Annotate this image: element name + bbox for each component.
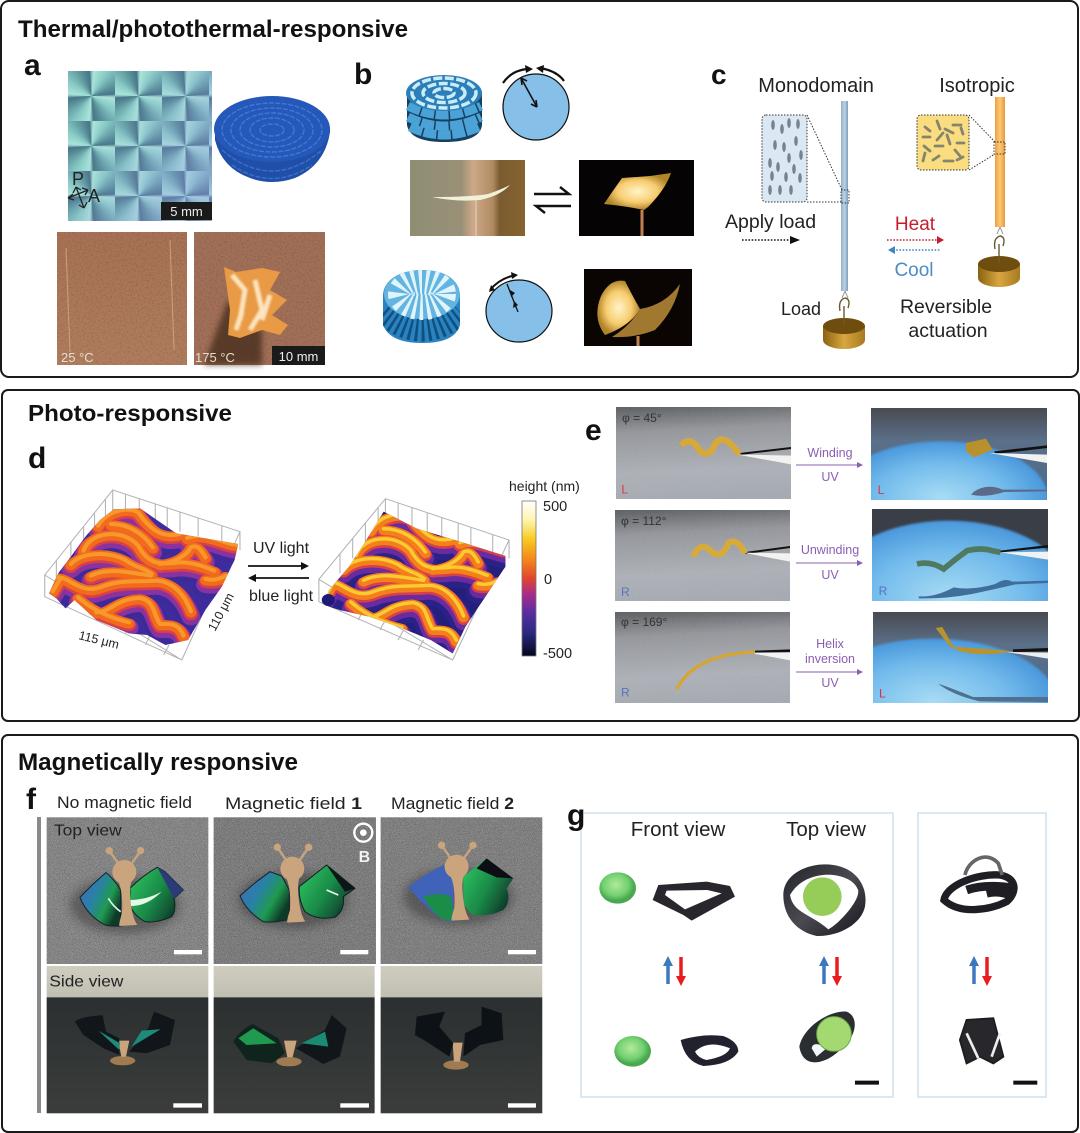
a: photo 175 °C: 10 mm: [279, 349, 318, 364]
g: ring front top: [653, 882, 735, 921]
g: ball front top: [599, 872, 636, 904]
label a: a: [24, 49, 41, 82]
c: reversible actuation label: actuation: [908, 320, 988, 342]
f: top view field 2: [381, 817, 542, 964]
g: ring front bottom: [681, 1035, 738, 1066]
g: ball top view top: [803, 877, 842, 916]
e: photo UV unwinding: R: [879, 584, 888, 598]
e: unwinding arrow and labels: [796, 543, 863, 582]
e: photo phi 112: [615, 510, 790, 601]
e: photo UV unwinding: [872, 509, 1048, 601]
d: height legend: 0: [544, 572, 552, 588]
e: photo phi 45: [616, 407, 791, 499]
a: polarizer labels: P: [72, 169, 84, 189]
b: radial cylinder: [383, 270, 460, 343]
heading: photo: Photo-responsive: [28, 400, 232, 426]
g: top view label: Top view: [786, 818, 866, 841]
g: ball front bottom: [614, 1036, 651, 1067]
c: orange rod with inset: [917, 97, 1005, 227]
panel: photo-responsive: [1, 389, 1080, 722]
g: ball top view bottom: [817, 1017, 851, 1051]
e: photo phi 112: R: [621, 585, 630, 599]
b: photo film curled glowing: [579, 160, 694, 236]
g: state arrows right: [969, 956, 992, 986]
b: photo film flat: [410, 160, 525, 236]
f: photo grid: [47, 817, 542, 1113]
c: heat and cool arrows: [887, 236, 944, 254]
e: helix inversion arrow and labels: [796, 637, 863, 690]
g: scale bar left: [855, 1081, 879, 1085]
f: column headings: [57, 794, 514, 813]
panel frame: [1, 1, 1078, 377]
heading: thermal: Thermal/photothermal-responsive: [18, 16, 408, 43]
d: axis label 115 um: 115 μm: [77, 628, 120, 652]
g: front view label: Front view: [631, 818, 725, 841]
e: photo UV winding: [871, 408, 1047, 500]
label b: b: [354, 58, 372, 91]
c: load label: Load: [781, 299, 821, 319]
a: polarizer labels: A: [88, 186, 100, 206]
panel frame: [2, 390, 1079, 721]
a: scale bar 5 mm: [161, 202, 212, 220]
e: photo phi 45: φ = 45°: [622, 411, 662, 425]
d: height legend: height (nm): [509, 478, 580, 494]
f: top view no field: [47, 817, 208, 964]
e: unwinding arrow and labels: UV: [821, 568, 839, 582]
c: apply load arrow: [742, 236, 800, 244]
e: helix inversion arrow and labels: UV: [821, 676, 839, 690]
a: polarizer labels: [68, 169, 100, 208]
a: photo 25 °C: [57, 232, 187, 365]
f: side view no field: Side view: [49, 974, 124, 991]
a: photo 175 °C: 175 °C: [195, 350, 235, 365]
d: axis label 110 um: 110 μm: [205, 591, 237, 633]
c: heading monodomain: Monodomain: [758, 75, 874, 97]
a: scale bar 5 mm: 5 mm: [170, 204, 203, 219]
f: column headings: Magnetic field 2: [391, 795, 514, 813]
e: unwinding arrow and labels: Unwinding: [801, 543, 859, 557]
d: height legend: -500: [543, 646, 572, 662]
b: photo film saddle glowing: [584, 269, 692, 346]
g: state arrows front: [663, 956, 686, 986]
c: heading isotropic: Isotropic: [939, 75, 1015, 97]
e: winding arrow and labels: [796, 446, 863, 484]
f: top view no field: Top view: [54, 823, 122, 840]
f: side bar: [37, 817, 41, 1113]
c: reversible actuation label: [900, 296, 992, 342]
label c: c: [711, 59, 727, 90]
f: column headings: Magnetic field 1: [225, 795, 362, 813]
heading: magnetic: Magnetically responsive: [18, 749, 298, 776]
e: photo UV helix inversion: [873, 612, 1048, 703]
f: side view no field: [47, 966, 208, 1113]
b: azimuthal cylinder: [406, 75, 482, 142]
g: ring right top: [944, 857, 1015, 910]
g: frame right: [918, 813, 1046, 1097]
g: ring right bottom: [960, 1018, 1003, 1063]
e: helix inversion arrow and labels: Helix: [816, 637, 845, 651]
c: cool label: Cool: [894, 260, 934, 281]
f: top view field 1: B: [359, 849, 370, 866]
a: photo 175 °C: [194, 232, 325, 365]
e: photo phi 169: R: [621, 686, 630, 700]
e: helix inversion arrow and labels: inversion: [805, 652, 855, 666]
g: frame left: [581, 813, 893, 1097]
d: surface plot left: [42, 490, 245, 660]
f: side view field 2: [381, 966, 542, 1113]
e: photo phi 169: φ = 169°: [621, 615, 667, 629]
a: blue disc model: [214, 96, 330, 182]
e: photo UV winding: L: [878, 483, 885, 497]
c: hook strings: [842, 227, 1003, 298]
d: height legend: 500: [543, 499, 567, 515]
e: winding arrow and labels: UV: [821, 470, 839, 484]
e: photo UV helix inversion: L: [879, 686, 886, 700]
panel: magnetically responsive: [2, 735, 1078, 1132]
g: ring top view bottom: [799, 1012, 855, 1062]
b: reversible arrows: [534, 187, 571, 213]
f: top view field 1: [214, 817, 376, 964]
b: director circle bottom: [486, 272, 552, 342]
label d: d: [28, 442, 46, 475]
d: height legend: [509, 478, 580, 662]
d: UV light label: UV light: [253, 540, 310, 557]
panel: thermal / photothermal-responsive: [1, 1, 1078, 377]
c: heat label: Heat: [895, 214, 936, 235]
a: photo 25 °C: 25 °C: [61, 350, 94, 365]
label f: f: [26, 783, 37, 816]
e: photo phi 45: L: [621, 483, 628, 497]
c: blue rod with inset: [762, 101, 849, 291]
e: photo phi 169: [615, 612, 790, 703]
c: reversible actuation label: Reversible: [900, 296, 992, 318]
d: arrows between surfaces: [248, 562, 309, 582]
f: column headings: No magnetic field: [57, 794, 192, 812]
panel frame: [2, 735, 1078, 1132]
g: ring top view top: [783, 864, 866, 936]
e: photo phi 112: φ = 112°: [621, 514, 667, 528]
label e: e: [585, 414, 602, 447]
d: blue light label: blue light: [249, 588, 314, 605]
g: scale bar right: [1013, 1081, 1037, 1085]
c: load weight left: [823, 298, 865, 349]
g: state arrows top: [819, 956, 842, 986]
label g: g: [567, 799, 585, 832]
g: objects: [599, 857, 1037, 1085]
f: side view field 1: [214, 966, 375, 1113]
e: winding arrow and labels: Winding: [807, 446, 853, 460]
a: pinwheel mosaic: [68, 71, 212, 221]
c: load weight right: [978, 236, 1020, 287]
b: director circle top: [503, 65, 569, 140]
c: apply load label: Apply load: [725, 211, 816, 233]
d: surface plot right: [318, 499, 511, 660]
